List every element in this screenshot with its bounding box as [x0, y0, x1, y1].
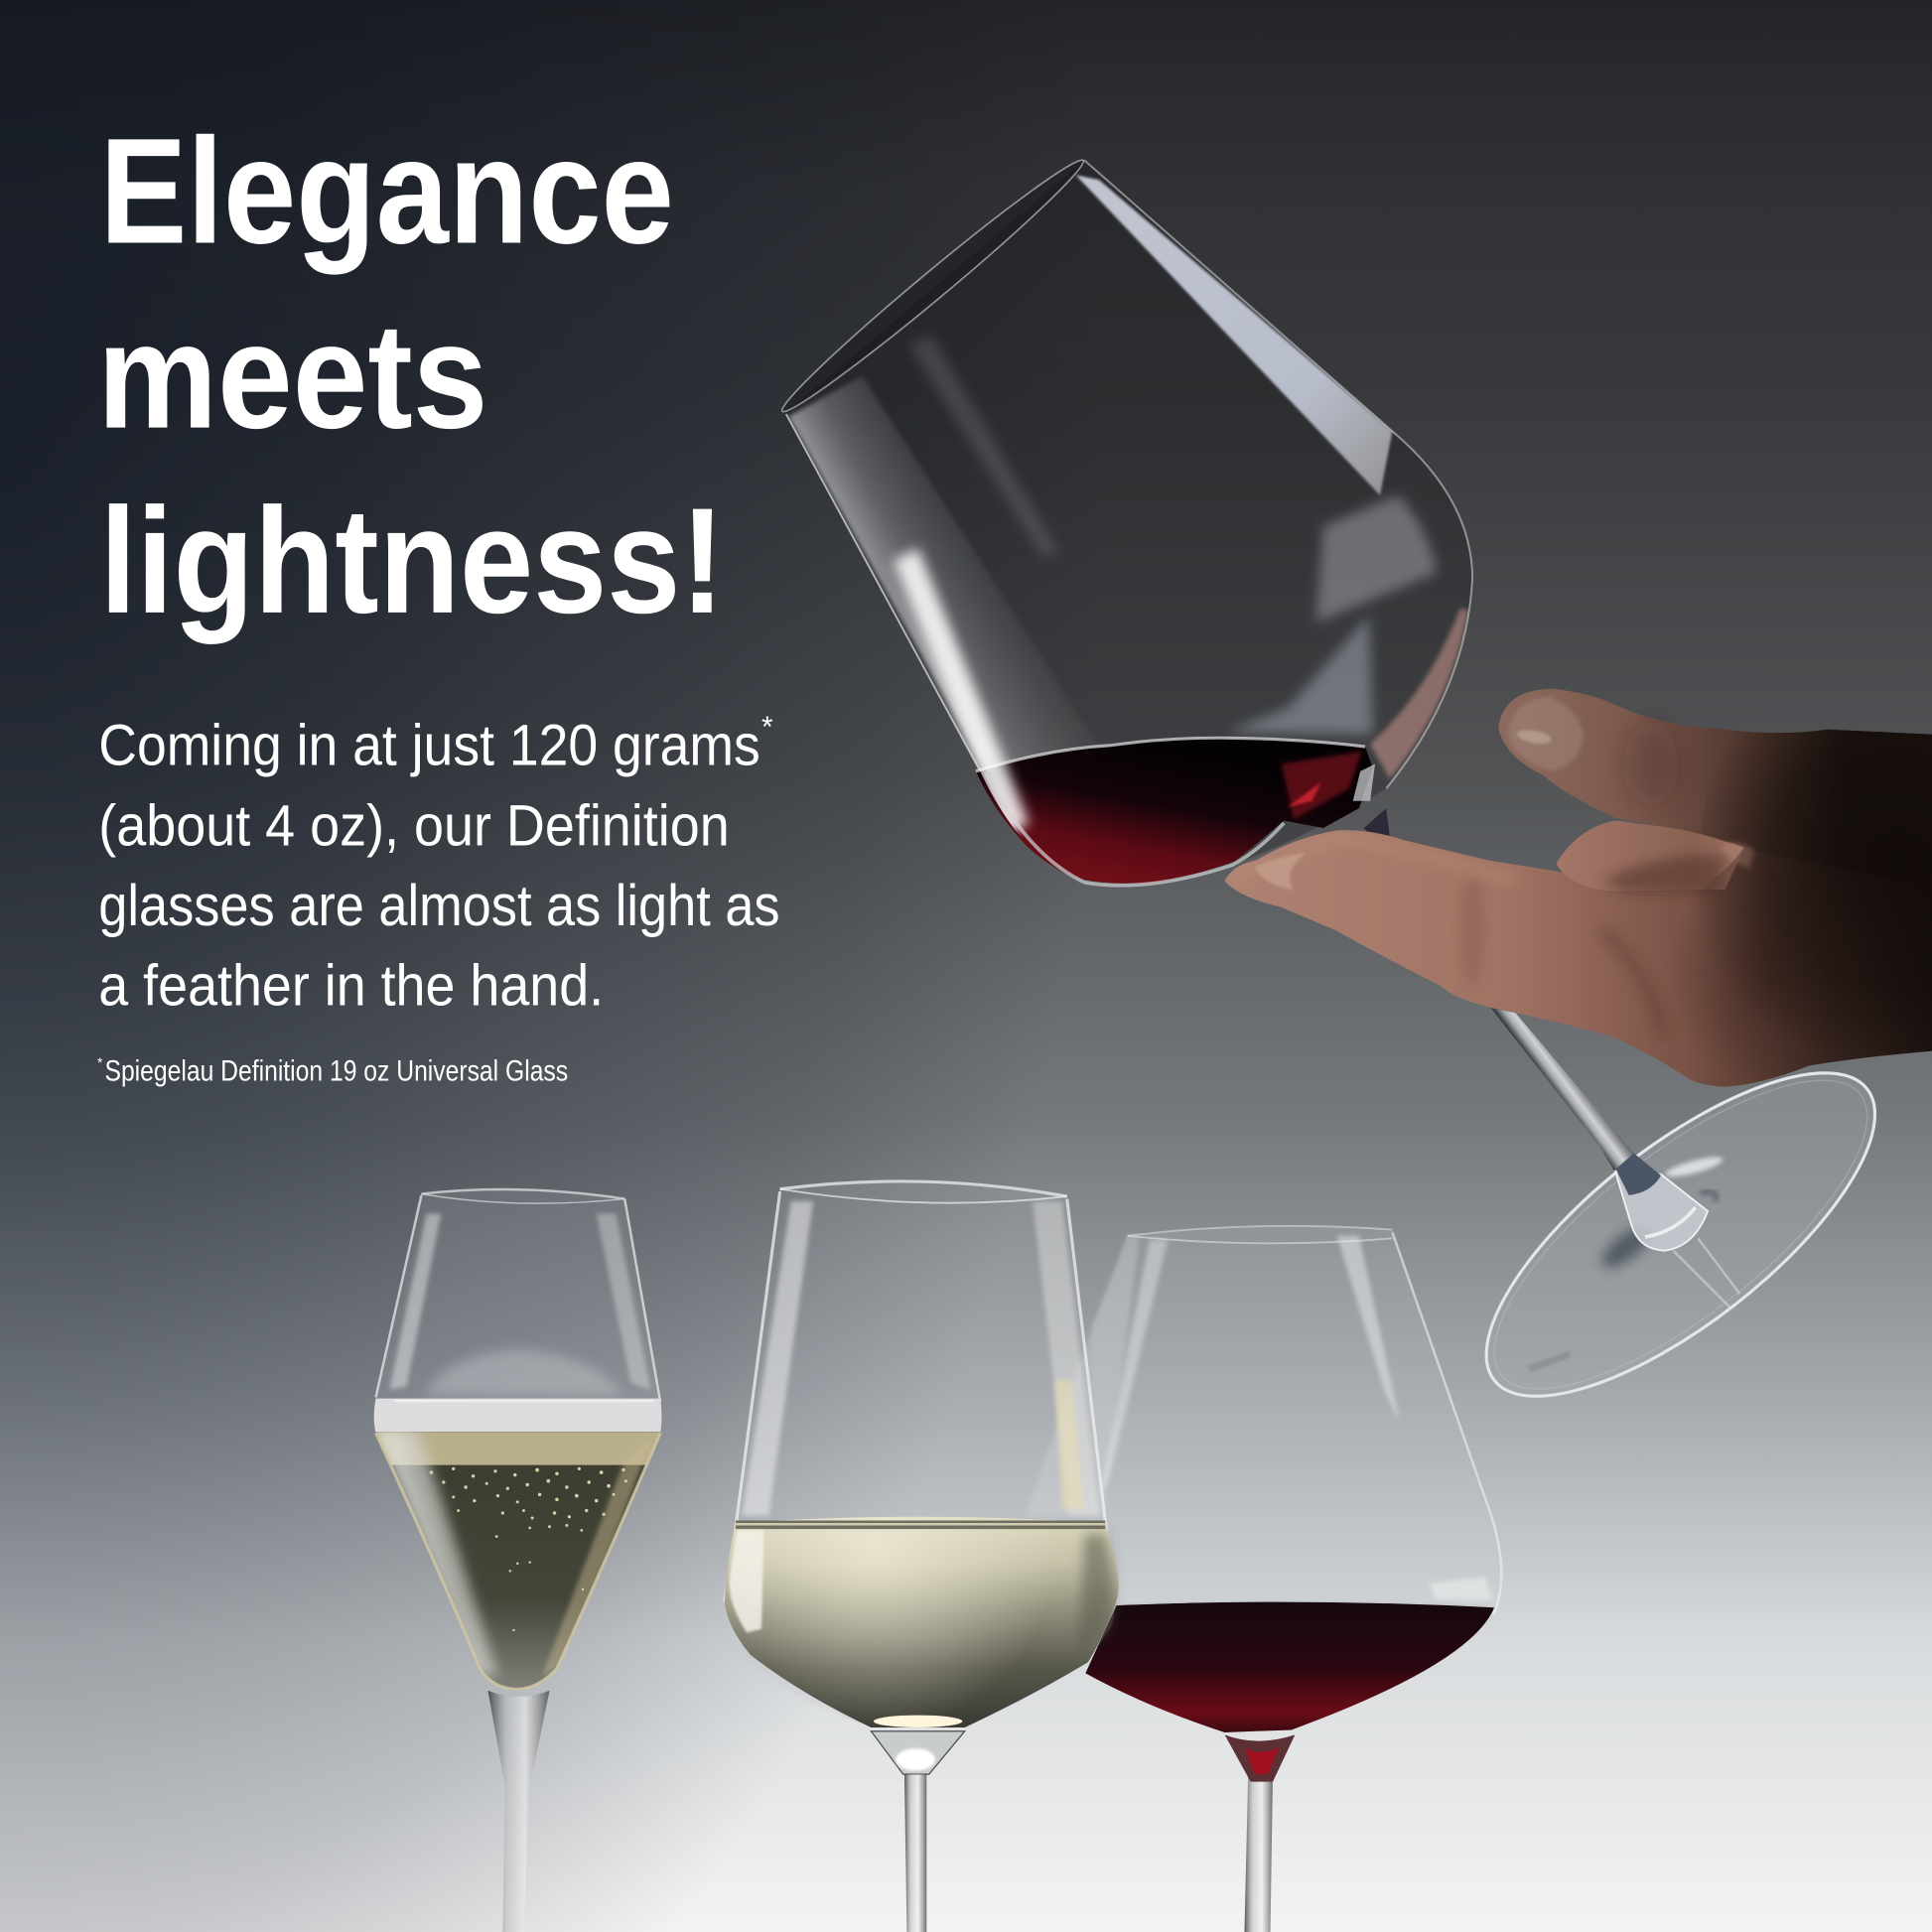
tilted glass: bowl: [773, 150, 1472, 886]
champagne bubbles: [430, 1467, 627, 1631]
left pale reflection band: [788, 376, 1115, 772]
body text: *: [761, 711, 773, 744]
rim ellipse: [773, 150, 1092, 422]
glass: champagne flute: [374, 1189, 661, 1932]
title: Elegance: [100, 107, 674, 275]
footnote: Spiegelau Definition 19 oz Universal Glass: [104, 1055, 568, 1087]
lower right light zone: [1315, 495, 1437, 622]
footnote: *: [97, 1055, 103, 1070]
title: [97, 107, 725, 645]
title: lightness!: [100, 478, 725, 645]
hand: [1225, 653, 1932, 1087]
body text: a feather in the hand.: [98, 954, 604, 1019]
glass: red wine behind: [1026, 1226, 1501, 1932]
glass: white wine: [725, 1181, 1119, 1932]
body text: (about 4 oz), our Definition: [98, 793, 730, 858]
body text: [98, 711, 780, 1019]
white glow along left wall: [894, 548, 1029, 838]
tilted glass: stem and foot: [1440, 1008, 1922, 1450]
body text: Coming in at just 120 grams: [98, 714, 760, 778]
foot spiegelau mark: [1528, 1350, 1570, 1373]
title: meets: [97, 293, 487, 461]
right bright streak: [1075, 175, 1392, 495]
body text: glasses are almost as light as: [98, 874, 780, 938]
